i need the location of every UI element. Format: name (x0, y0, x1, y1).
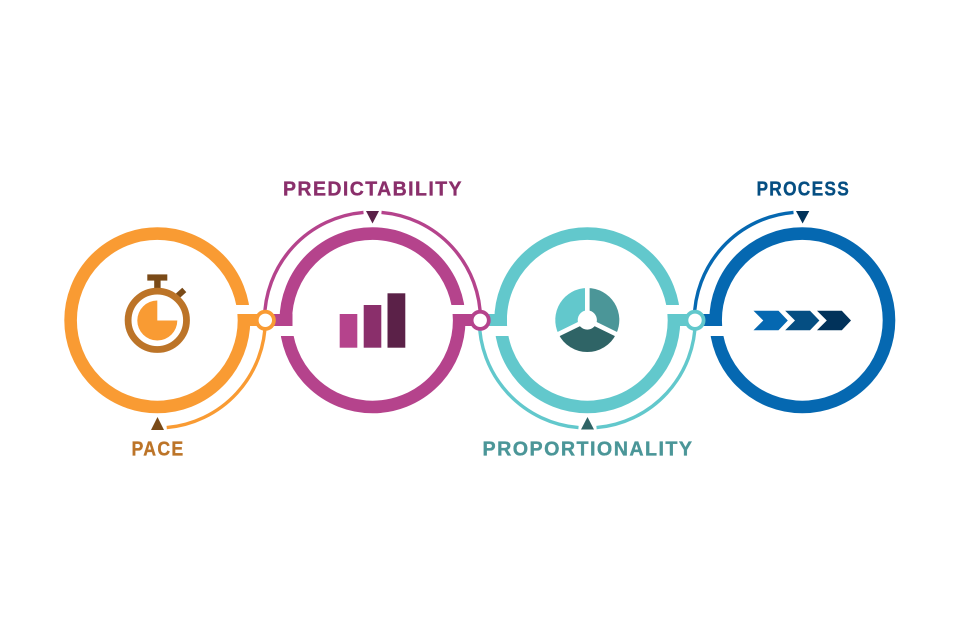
panel: proportionality (480, 234, 696, 461)
icon: stopwatch (128, 274, 186, 349)
marker: proportionality triangle (581, 417, 594, 430)
marker: pace triangle (151, 417, 164, 430)
ring: pace (71, 234, 266, 407)
ring: predictability (265, 234, 481, 407)
node: pace to predictability (257, 312, 274, 329)
heading: process: PROCESS (756, 178, 850, 201)
marker: process triangle (796, 211, 809, 224)
arcs: thin connector lines (167, 212, 793, 428)
heading: pace: PACE (132, 438, 184, 461)
node: predictability to proportionality (472, 312, 489, 329)
icon: chevrons (754, 311, 851, 330)
heading: predictability: PREDICTABILITY (283, 178, 463, 201)
ring: proportionality (480, 234, 696, 407)
heading: proportionality: PROPORTIONALITY (482, 438, 694, 461)
marker: predictability triangle (366, 211, 379, 224)
icon: three-part pie (555, 286, 619, 352)
icon: bar chart (340, 293, 405, 348)
ring: process (695, 234, 889, 407)
panel: predictability (265, 178, 481, 407)
panel: pace (71, 234, 266, 461)
panel: process (695, 178, 889, 407)
node: proportionality to process (686, 312, 704, 329)
